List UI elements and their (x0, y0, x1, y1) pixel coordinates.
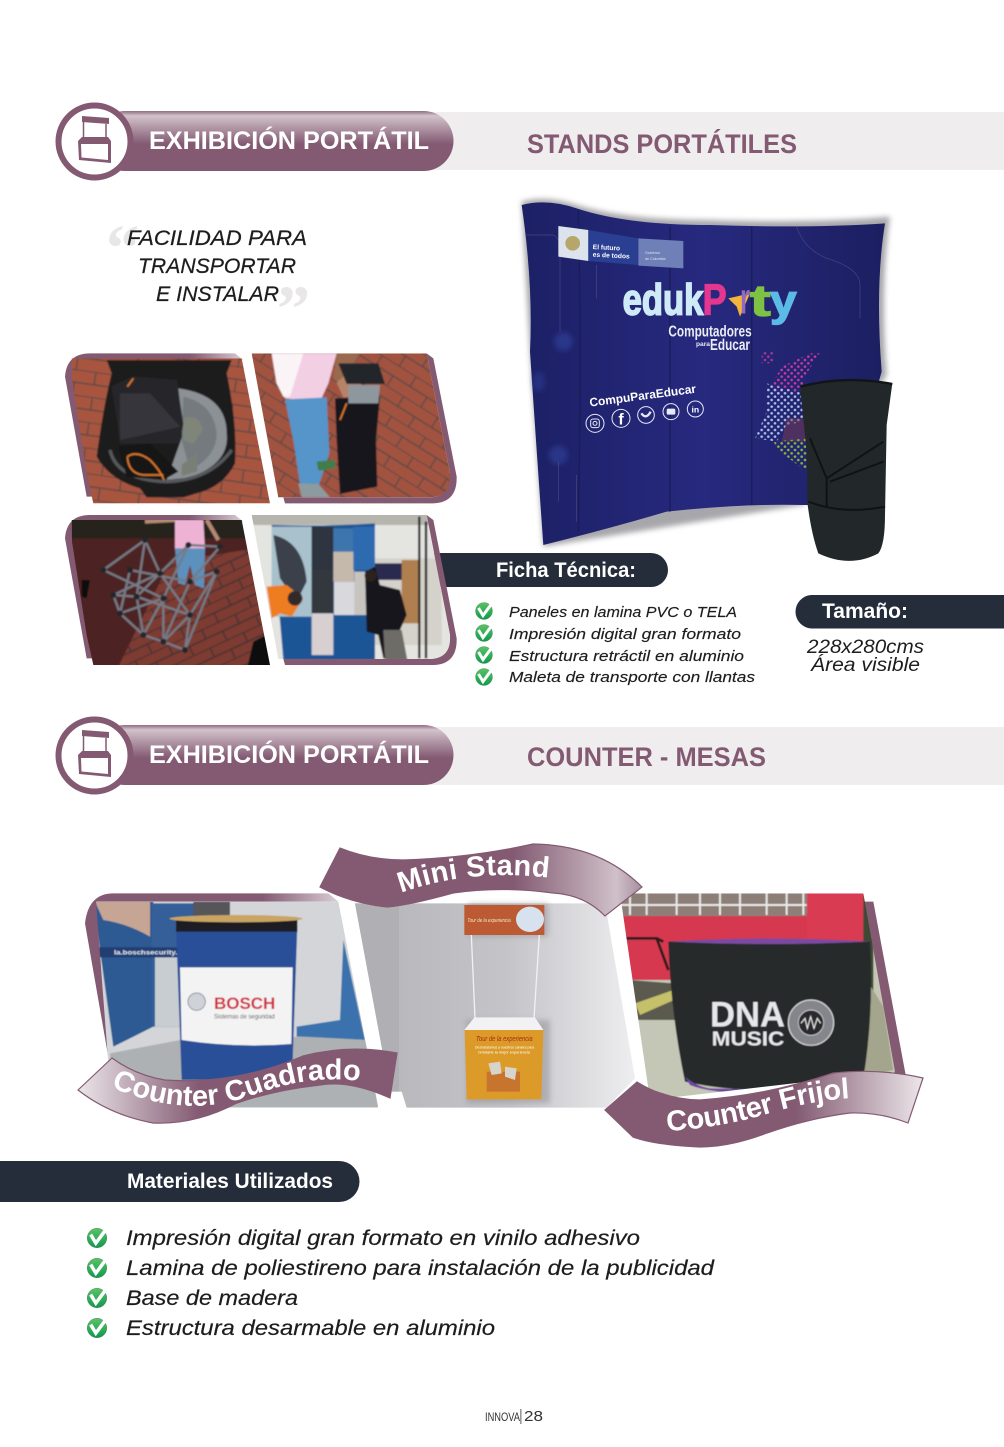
government logo strip: Gobierno (645, 251, 660, 255)
ficha técnica checklist (476, 602, 756, 686)
social icons: in (691, 404, 699, 414)
ficha técnica label: Ficha Técnica: (496, 559, 636, 582)
stand header board (464, 905, 544, 935)
photo: transport case with contents (65, 353, 277, 508)
photo: counter frijol: DNA (710, 996, 785, 1035)
photo: counter cuadrado (85, 893, 383, 1113)
icon: portable counter (58, 106, 130, 178)
materiales utilizados label (0, 1161, 360, 1202)
quote text: FACILIDAD PARA (127, 227, 307, 250)
footer page mark: INNOVA (485, 1410, 520, 1424)
purple pill (95, 725, 454, 785)
item: estructura (476, 646, 744, 665)
quote block (106, 212, 310, 346)
item: estructura: Estructura retráctil en aluminio (509, 648, 744, 665)
photo: counter cuadrado: BOSCH (214, 994, 275, 1013)
ribbon: counter frijol: Counter Frijol (667, 1077, 848, 1131)
government logo strip: de Colombia (645, 257, 666, 261)
photo: counter cuadrado: la.boschsecurity. (114, 950, 178, 957)
ribbon: mini stand (319, 843, 643, 917)
heading: counter mesas: COUNTER - MESAS (527, 742, 766, 772)
ficha técnica label (430, 553, 668, 587)
quote text: E INSTALAR (156, 283, 279, 306)
carrying case (800, 379, 892, 561)
grey title band (430, 112, 1004, 170)
photo: folding frame on floor (65, 515, 277, 670)
closing quotation mark: ” (277, 273, 310, 346)
opening quotation mark: “ (106, 212, 139, 285)
item: lamina: Lamina de poliestireno para instalación de la publicidad (126, 1257, 715, 1280)
dotted map of Colombia (755, 352, 820, 472)
ribbon: mini stand: Mini Stand (396, 856, 549, 892)
tamaño value (806, 637, 925, 676)
icon: portable counter (58, 720, 130, 792)
stand counter: brindarle la mejor experiencia (478, 1049, 531, 1054)
government logo strip: es de todos (593, 252, 630, 261)
stand poles (471, 935, 539, 1018)
quote text (127, 227, 307, 306)
heading: exhibición portátil: EXHIBICIÓN PORTÁTIL (149, 739, 429, 769)
photo: counter frijol (622, 893, 906, 1097)
quote text: TRANSPORTAR (138, 255, 296, 278)
tamaño label (795, 595, 1004, 628)
logo: Computadores para Educar: para (696, 342, 711, 348)
stand header board: Tour de la experiencia (467, 918, 511, 924)
ribbon label curve (667, 1098, 852, 1131)
photo grid: stand setup (65, 350, 460, 670)
ribbon label curve (401, 875, 552, 893)
footer page mark: 28 (524, 1408, 543, 1425)
wall panel (522, 202, 885, 545)
photo: people installing the stand (247, 512, 460, 665)
government logo strip (558, 226, 683, 268)
photo: mini stand (355, 903, 635, 1108)
materiales checklist (87, 1227, 715, 1340)
wall shadow (522, 199, 890, 547)
logo: edukParty (623, 274, 797, 326)
heading: stands portátiles: STANDS PORTÁTILES (527, 128, 797, 159)
footer page mark (485, 1408, 543, 1425)
social icons (586, 401, 703, 432)
stand counter: Desinstalamos a nuestros canales para (475, 1044, 535, 1049)
social icons: f (618, 411, 624, 428)
logo: Computadores para Educar (668, 324, 752, 354)
ribbon: counter cuadrado: Counter Cuadrado (114, 1058, 360, 1106)
tamaño value: 228x280cms (806, 637, 925, 658)
logo: edukParty: t (750, 277, 771, 326)
materiales utilizados label: Materiales Utilizados (127, 1170, 333, 1193)
logo: edukParty: y (770, 277, 797, 326)
stand shadow (467, 903, 550, 1103)
stand counter: Tour de la experiencia (476, 1036, 533, 1043)
purple pill (95, 111, 454, 171)
item: impresión: Impresión digital gran formato (509, 626, 741, 643)
item: impresión: Impresión digital gran formato en vinilo adhesivo (126, 1227, 640, 1250)
logo: edukParty: r (740, 274, 750, 323)
ribbon label curve (111, 1079, 368, 1106)
item: base: Base de madera (126, 1287, 298, 1310)
product photo: curved pop-up stand with carrying case (522, 199, 892, 561)
government logo strip: El futuro (593, 244, 620, 252)
photo: counter cuadrado: Sistemas de seguridad (214, 1014, 275, 1020)
logo: edukParty: P (703, 275, 727, 324)
ribbon: counter frijol (604, 1070, 924, 1148)
item: paneles: Paneles en lamina PVC o TELA (509, 604, 737, 621)
heading: exhibición portátil: EXHIBICIÓN PORTÁTIL (149, 125, 429, 155)
item: maleta: Maleta de transporte con llantas (509, 669, 756, 686)
tamaño label: Tamaño: (822, 600, 908, 623)
section header: counter (58, 720, 1004, 792)
logo: Computadores para Educar: Educar (710, 337, 750, 354)
photo: person holding folded structure (247, 350, 460, 503)
section header: stands (58, 106, 1004, 178)
item: impresión (476, 624, 741, 643)
stand counter (464, 1017, 543, 1099)
social handle: CompuParaEducar (589, 382, 697, 410)
tamaño value: Área visible (810, 655, 920, 676)
photo: counter frijol: MUSIC (712, 1028, 784, 1051)
item: estructura: Estructura desarmable en aluminio (126, 1317, 495, 1340)
grey title band (430, 727, 1004, 785)
logo: edukParty: eduk (623, 275, 704, 324)
logo: Computadores para Educar: Computadores (668, 324, 752, 341)
ribbon: counter cuadrado (77, 1048, 398, 1124)
